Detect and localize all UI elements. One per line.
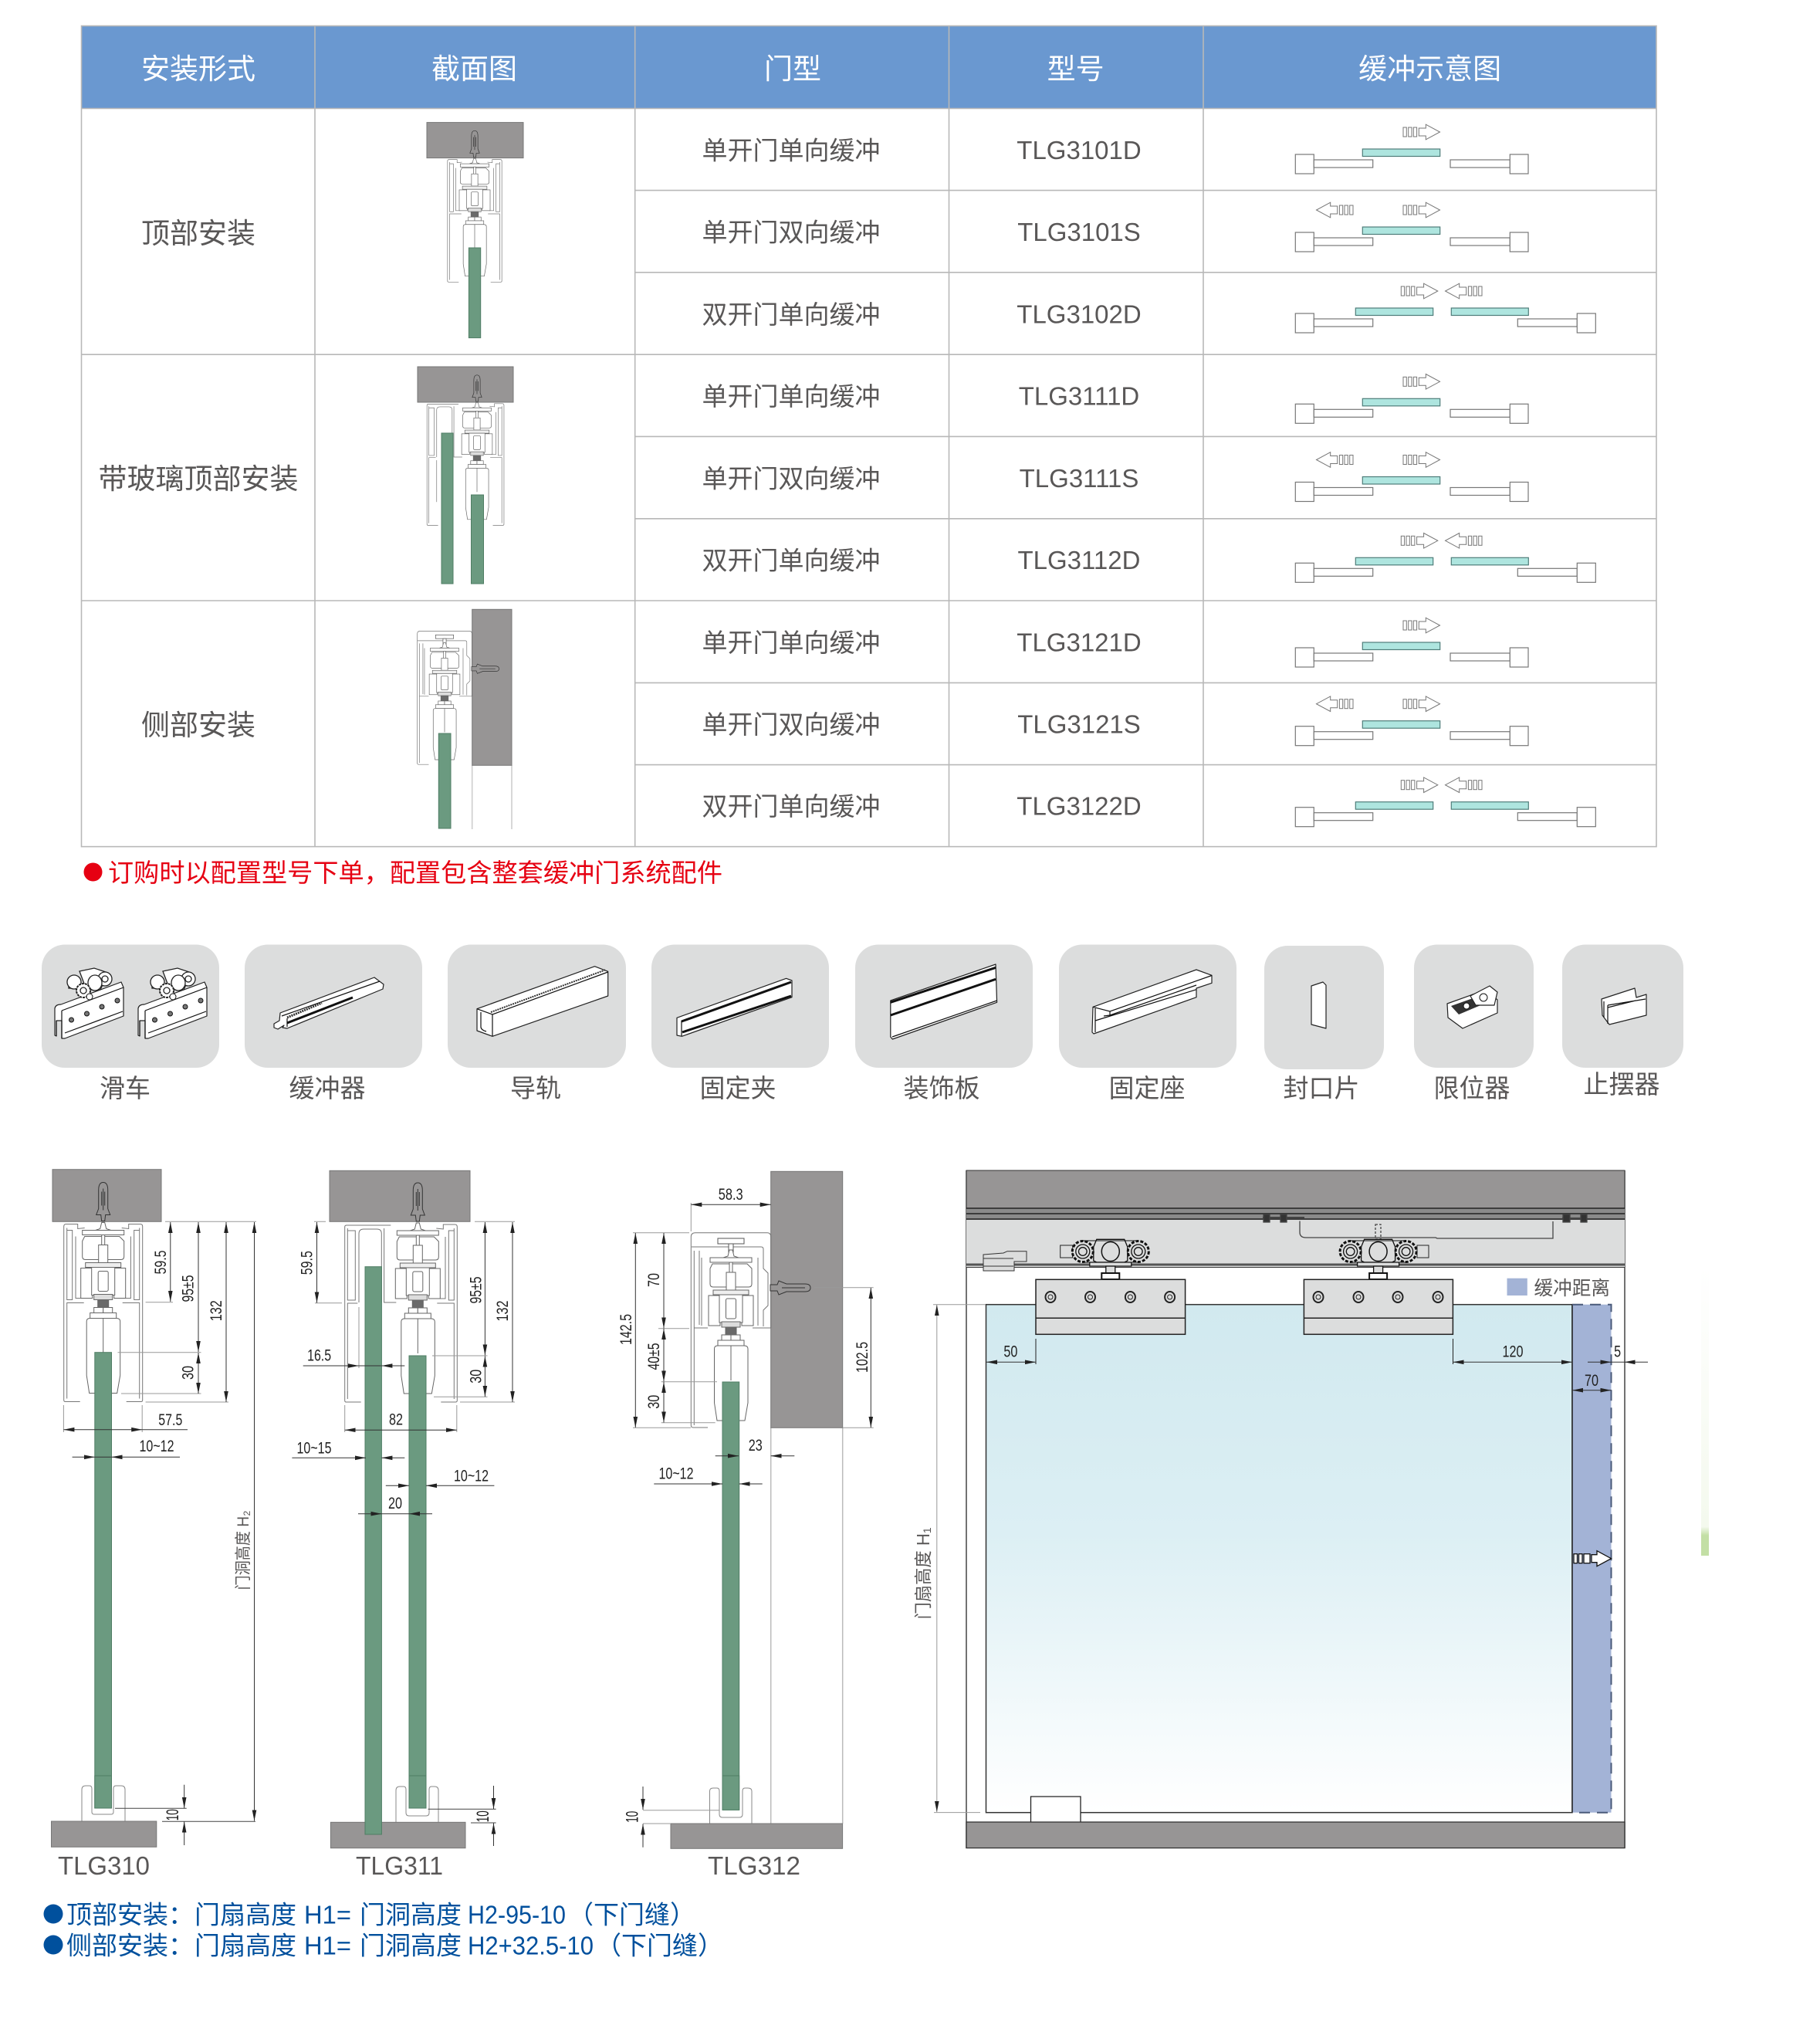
ceiling block (52, 1170, 161, 1221)
data table (82, 26, 1656, 847)
door dimensions: 50 (1003, 1343, 1017, 1361)
legend: buffer distance: 缓冲距离 (1534, 1278, 1610, 1299)
accessory: fixing clip: 固定夹 (699, 1074, 776, 1102)
cross section: side mount (418, 609, 512, 829)
dimensions: 23 (749, 1437, 763, 1455)
dimensions: 95±5 (179, 1275, 198, 1302)
formula: top mount: 顶部安装： (66, 1901, 194, 1929)
formula: side mount: （下门缝） (596, 1932, 723, 1960)
formula: side mount: H2+32.5-10 (468, 1932, 594, 1960)
install type labels (99, 218, 298, 741)
left stopper (983, 1251, 1027, 1271)
model number column: TLG3112D (1018, 546, 1140, 574)
model label: TLG311 (356, 1851, 443, 1880)
header labels: 门型 (764, 53, 821, 85)
clamp plate left (1036, 1279, 1186, 1334)
door type column: 单开门双向缓冲 (702, 465, 880, 493)
model label: TLG310 (58, 1851, 150, 1880)
accessory: anti-swing stop (1562, 945, 1683, 1099)
floor guide and floor (330, 1267, 465, 1848)
dimensions: 10 (622, 1811, 642, 1823)
accessory: decorative panel: 装饰板 (903, 1074, 980, 1102)
buffer diagram row 3 (1295, 283, 1595, 333)
dimensions: 70 (645, 1273, 663, 1287)
door type column: 单开门双向缓冲 (702, 710, 880, 739)
dimensions: 10~12 (454, 1467, 489, 1485)
buffer diagram row 6 (1295, 533, 1595, 582)
glass panels (409, 1356, 426, 1808)
dimensions: 16.5 (307, 1347, 331, 1365)
buffer diagram row 1 (1295, 124, 1528, 174)
accessory: fixing clip (651, 945, 829, 1102)
dimensions: 95±5 (468, 1277, 485, 1303)
door dimensions: 5 (1614, 1343, 1621, 1361)
buffer diagram row 9 (1295, 777, 1595, 827)
buffer diagram row 5 (1295, 452, 1528, 502)
dimensions: 142.5 (617, 1314, 635, 1345)
dimensions: 40±5 (645, 1343, 663, 1370)
model number column: TLG3121S (1017, 710, 1141, 738)
wall block (771, 1171, 843, 1428)
door type column: 单开门单向缓冲 (702, 628, 880, 657)
dimensions: 132 (494, 1300, 512, 1322)
order note: 订购时以配置型号下单，配置包含整套缓冲门系统配件 (108, 859, 722, 887)
model number column: TLG3111S (1020, 464, 1138, 493)
model number column: TLG3122D (1017, 792, 1142, 820)
dimensions: 82 (389, 1411, 403, 1429)
hanger mechanism (64, 1183, 143, 1402)
formula: side mount: 侧部安装： (66, 1932, 194, 1960)
model number column: TLG3121D (1017, 628, 1142, 656)
section drawing TLG312 (617, 1171, 874, 1880)
buffer diagram row 8 (1295, 696, 1528, 746)
formula: side mount: 门洞高度 (360, 1932, 462, 1960)
door type column: 单开门单向缓冲 (702, 382, 880, 411)
accessory: decorative panel (855, 945, 1033, 1102)
dimensions: 30 (645, 1395, 663, 1409)
door dimensions: 70 (1585, 1372, 1598, 1390)
model number column: TLG3111D (1019, 381, 1139, 411)
cross section: top mount (427, 123, 523, 338)
track bands (966, 1208, 1625, 1268)
buffer distance zone (1572, 1305, 1612, 1813)
door type column (702, 136, 880, 821)
header labels: 安装形式 (141, 53, 255, 85)
model number column: TLG3101D (1017, 136, 1142, 164)
formula: top mount: （下门缝） (568, 1901, 695, 1929)
formula: side mount: 门扇高度 (195, 1932, 296, 1960)
floor guide and floor (671, 1776, 843, 1848)
accessory: trolley (42, 945, 219, 1102)
buffer diagram row 7 (1295, 618, 1528, 667)
dimensions (63, 1221, 256, 1845)
buffer diagram row 2 (1295, 202, 1528, 252)
formula: top mount: H1= (304, 1901, 351, 1929)
dimensions: 102.5 (854, 1342, 871, 1373)
header labels: 截面图 (431, 53, 517, 85)
formula: top mount (43, 1901, 695, 1929)
accessory: limiter: 限位器 (1434, 1074, 1510, 1102)
dimensions: 57.5 (158, 1411, 182, 1429)
dimensions: 30 (468, 1370, 485, 1384)
door dimensions: 门扇高度 H₁ (913, 1527, 933, 1620)
floor stop (1031, 1797, 1081, 1823)
front elevation door diagram (913, 1170, 1648, 1848)
side hanger mechanism (691, 1233, 810, 1428)
glass panel (722, 1382, 739, 1810)
accessories row (42, 945, 1683, 1102)
accessory: trolley: 滑车 (100, 1074, 151, 1102)
installation formulas (43, 1901, 723, 1960)
accessory: mounting base (1059, 945, 1236, 1102)
door type column: 单开门双向缓冲 (702, 218, 880, 247)
model label: TLG312 (708, 1851, 800, 1880)
dimensions: 59.5 (298, 1251, 316, 1275)
floor slab (966, 1822, 1625, 1848)
install type labels: 侧部安装 (141, 710, 255, 741)
dimensions: 132 (208, 1300, 225, 1321)
formula: top mount: 门扇高度 (195, 1901, 296, 1929)
glass door panel (986, 1305, 1572, 1813)
door type column: 双开门单向缓冲 (702, 547, 880, 574)
formula: side mount (43, 1932, 723, 1960)
dimensions (292, 1221, 515, 1846)
door dimensions (913, 1305, 1648, 1813)
dimensions: 10~12 (139, 1438, 174, 1455)
accessory: guide rail: 导轨 (510, 1074, 561, 1102)
table header bar (82, 26, 1656, 108)
dimensions: 58.3 (719, 1186, 743, 1204)
dimensions: 10 (163, 1809, 182, 1820)
hanger mechanism (345, 1183, 457, 1402)
header labels (141, 53, 1501, 85)
model number column (1017, 136, 1142, 820)
section drawing TLG311 (292, 1170, 515, 1880)
buffer diagram row 4 (1295, 374, 1528, 423)
roller right (1340, 1239, 1429, 1279)
install type labels: 顶部安装 (141, 218, 255, 249)
door type column: 双开门单向缓冲 (702, 300, 880, 329)
accessory: limiter (1414, 945, 1534, 1102)
dimensions: 10~12 (659, 1465, 693, 1483)
door type column: 双开门单向缓冲 (702, 792, 880, 821)
accessory: mounting base: 固定座 (1108, 1074, 1186, 1102)
accessory: buffer (245, 945, 422, 1102)
dimensions: 门洞高度 H₂ (235, 1510, 252, 1590)
dimensions: 20 (388, 1495, 402, 1512)
formula: top mount: H2-95-10 (468, 1901, 566, 1929)
header labels: 缓冲示意图 (1358, 53, 1501, 85)
wall below mount (771, 1428, 843, 1824)
roller left (1061, 1239, 1148, 1279)
dimensions: 30 (179, 1366, 198, 1380)
section drawing TLG310 (51, 1170, 256, 1880)
dimensions: 10~15 (296, 1439, 332, 1457)
glass panel (95, 1353, 111, 1808)
ceiling block (330, 1170, 470, 1221)
model number column: TLG3101S (1017, 218, 1141, 246)
formula: side mount: H1= (304, 1932, 351, 1960)
accessory: buffer: 缓冲器 (289, 1074, 366, 1102)
direction arrow (1574, 1551, 1612, 1566)
accessory: end cap (1264, 946, 1384, 1102)
header labels: 型号 (1047, 53, 1105, 85)
faint green edge artifact (1701, 1266, 1709, 1556)
model number column: TLG3102D (1017, 300, 1142, 329)
accessory: guide rail (448, 945, 626, 1102)
frame sides (966, 1170, 1625, 1848)
dimensions: 59.5 (152, 1251, 170, 1274)
dimensions: 10 (473, 1810, 492, 1822)
door dimensions: 120 (1502, 1343, 1524, 1361)
clamp plate right (1304, 1279, 1453, 1334)
accessory: anti-swing stop: 止摆器 (1584, 1070, 1659, 1099)
cross section: top mount with glass (418, 367, 513, 584)
accessory: end cap: 封口片 (1283, 1074, 1360, 1102)
install type labels: 带玻璃顶部安装 (99, 463, 298, 495)
header concrete (966, 1170, 1625, 1208)
door type column: 单开门单向缓冲 (702, 136, 880, 165)
buffer outline and bolts (1263, 1214, 1587, 1239)
floor guide (51, 1776, 157, 1847)
dimensions (617, 1186, 874, 1848)
formula: top mount: 门洞高度 (360, 1901, 462, 1929)
